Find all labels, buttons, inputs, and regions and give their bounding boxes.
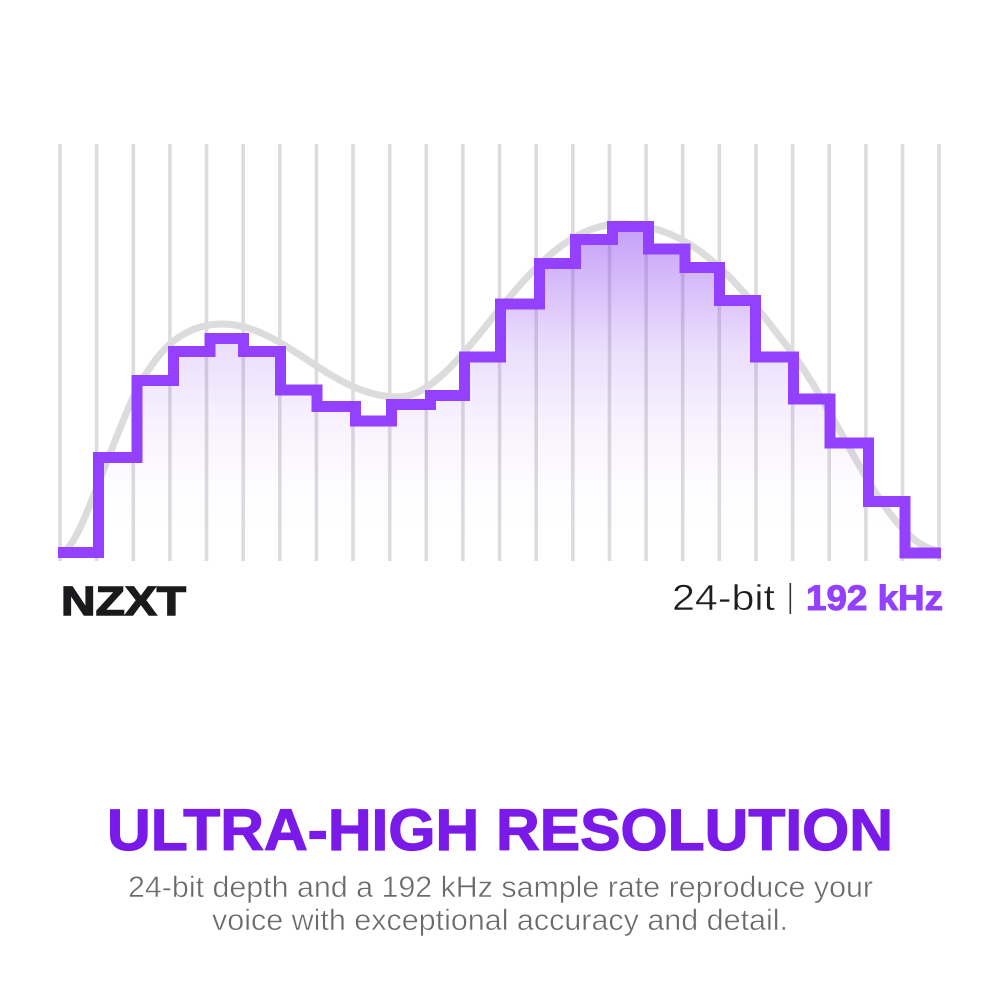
chart: sampled waveform — [58, 144, 941, 561]
spec label: 24-bit | 192 kHz — [672, 577, 943, 618]
spec label: 24-bit | 192 kHz: 24-bit — [672, 577, 775, 618]
logo: NZXT: NZXT — [61, 578, 186, 624]
description text: voice with exceptional accuracy and detail. — [212, 904, 788, 937]
heading: ULTRA-HIGH RESOLUTION — [107, 798, 893, 863]
analog curve — [62, 224, 941, 553]
spec label: 24-bit | 192 kHz: 192 kHz — [806, 579, 943, 618]
sample grid lines — [60, 144, 939, 561]
gradient fill under the steps — [98, 226, 905, 553]
digital step line — [58, 226, 941, 553]
description text — [128, 871, 873, 937]
description text: 24-bit depth and a 192 kHz sample rate reproduce your — [128, 871, 873, 904]
